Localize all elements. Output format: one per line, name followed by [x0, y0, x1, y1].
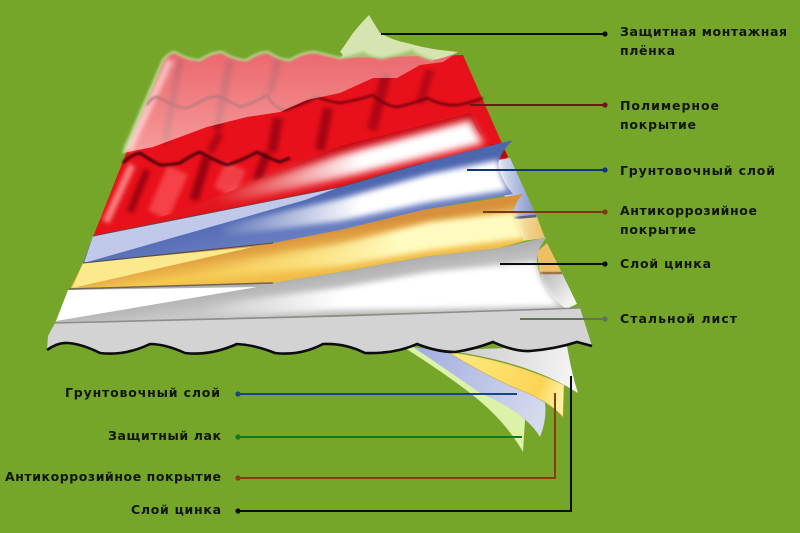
layered roof sheet: [47, 52, 592, 354]
callout: Защитный лак: [108, 428, 522, 443]
layer: blue primer: [83, 140, 537, 263]
callout: Антикоррозийное покрытие: [483, 203, 757, 237]
upper tile joint: [147, 95, 483, 110]
callout: Антикоррозийное покрытие (bottom): Антикоррозийное покрытие: [5, 469, 221, 484]
callout: Грунтовочный слой: [467, 163, 775, 178]
callout: Слой цинка (bottom): Слой цинка: [131, 502, 221, 517]
callout: Защитная монтажная плёнка: [381, 24, 787, 58]
layer: steel sheet: [47, 308, 592, 354]
lower tile joint: [123, 152, 290, 165]
tail: anticorrosion coating: [448, 352, 564, 417]
callout: Слой цинка (bottom): [131, 376, 571, 517]
layer: silver zinc: [55, 237, 580, 323]
layer: protective film: [123, 15, 458, 153]
callout: Полимерное покрытие: Полимерное: [620, 98, 719, 113]
tail: protective varnish: [405, 347, 525, 452]
callout: Защитная монтажная плёнка: плёнка: [620, 43, 675, 58]
callout: Грунтовочный слой (bottom): Грунтовочный слой: [65, 385, 220, 400]
roof tile ribs: [106, 60, 430, 222]
callout: Грунтовочный слой: Грунтовочный слой: [620, 163, 775, 178]
layer: red polymer coating: [93, 52, 508, 238]
layer: yellow anticorrosion coating: [70, 194, 562, 289]
callout: Антикоррозийное покрытие (bottom): [5, 393, 555, 484]
red band with white highlight: [93, 113, 497, 238]
pale primer wedge: [84, 187, 340, 263]
callout: Антикоррозийное покрытие: Антикоррозийное: [620, 203, 757, 218]
gold highlight: [190, 212, 524, 280]
wavy lower edge: [47, 342, 592, 354]
callout: Стальной лист: [520, 311, 738, 326]
callout: Полимерное покрытие: покрытие: [620, 117, 696, 132]
tail: primer layer: [413, 347, 545, 437]
callout: Защитная монтажная плёнка: Защитная монтажная: [620, 24, 787, 39]
white zinc wedge: [56, 287, 257, 321]
lower curled layer tails: [405, 346, 578, 452]
callout: Грунтовочный слой (bottom): [65, 385, 517, 400]
callout: Стальной лист: Стальной лист: [620, 311, 738, 326]
pale yellow wedge: [72, 247, 253, 288]
silver highlight: [200, 262, 560, 318]
callout: Антикоррозийное покрытие: покрытие: [620, 222, 696, 237]
tail: zinc layer: [450, 346, 578, 393]
callout: Защитный лак: Защитный лак: [108, 428, 222, 443]
blue highlight: [220, 160, 508, 236]
callout: Слой цинка: Слой цинка: [620, 256, 711, 271]
callout: Слой цинка: [500, 256, 711, 271]
red curled edge: [468, 105, 508, 160]
callout: Полимерное покрытие: [470, 98, 719, 132]
